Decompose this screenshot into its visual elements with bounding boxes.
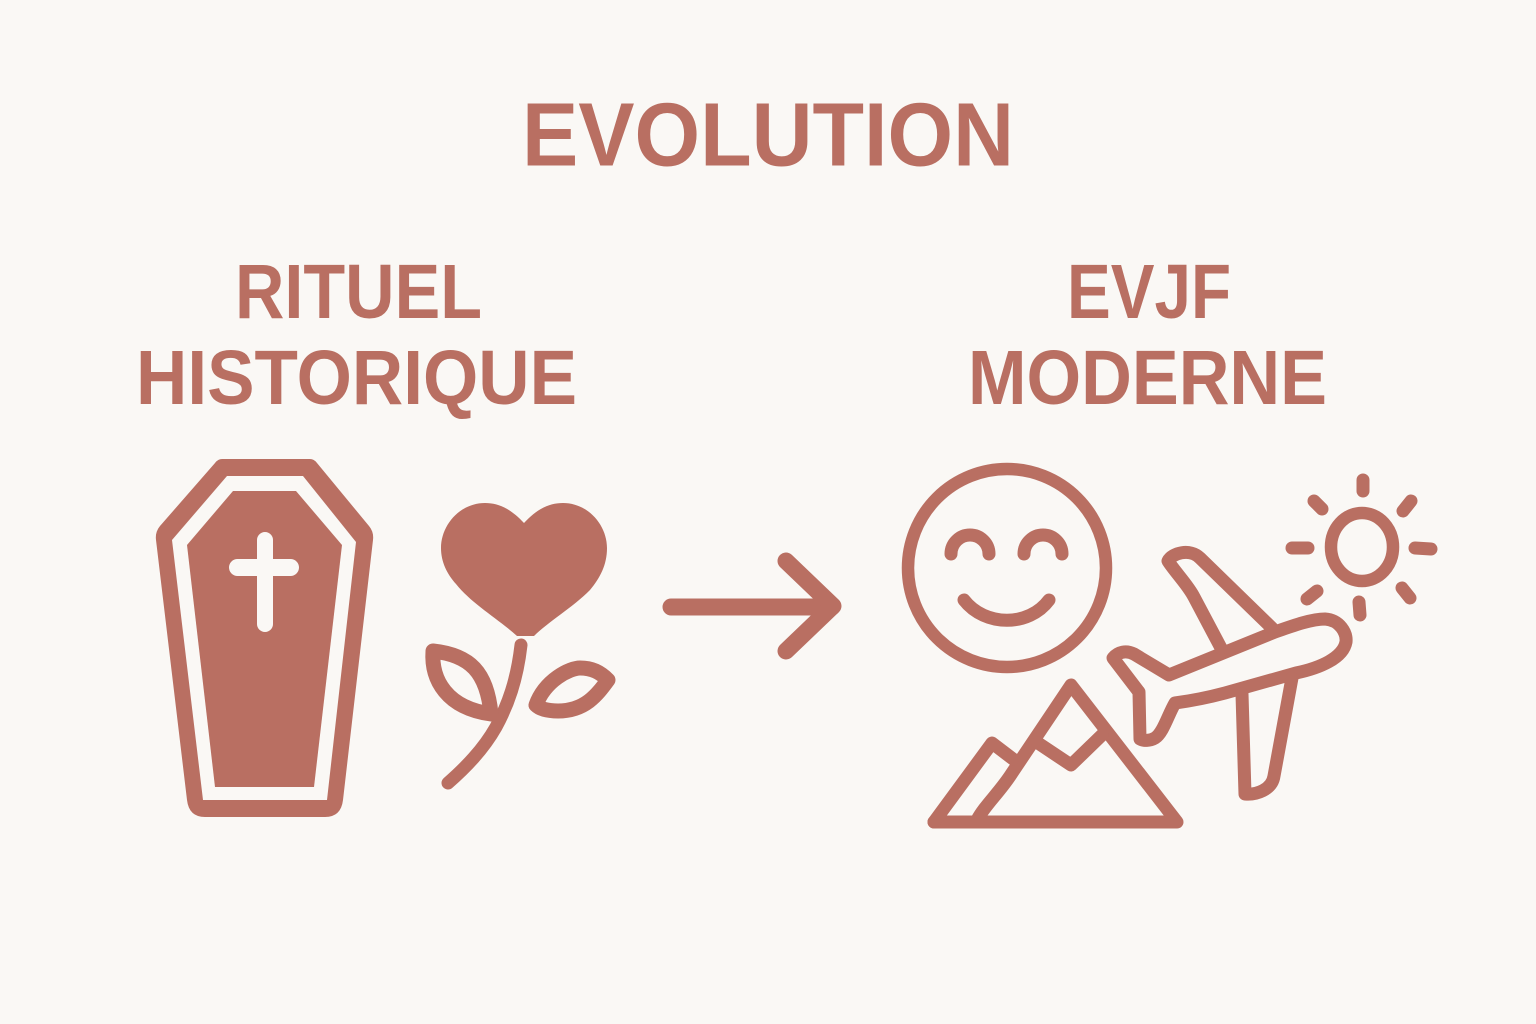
heading: rituel historique: HISTORIQUE <box>136 335 577 421</box>
icon: coffin with cross <box>156 459 373 817</box>
heading: rituel historique: RITUEL <box>235 249 482 335</box>
icon: sun <box>1292 480 1431 615</box>
icon: smiley face <box>908 469 1106 667</box>
arrow <box>671 561 833 651</box>
heading: evjf moderne <box>968 249 1327 421</box>
heading: rituel historique <box>136 249 577 421</box>
icon: airplane <box>1113 552 1346 794</box>
heading: evjf moderne: EVJF <box>1067 249 1231 335</box>
icon: heart flower <box>433 503 608 783</box>
icon: mountains <box>934 685 1177 822</box>
title: EVOLUTION <box>522 86 1014 186</box>
heading: evjf moderne: MODERNE <box>968 335 1327 421</box>
